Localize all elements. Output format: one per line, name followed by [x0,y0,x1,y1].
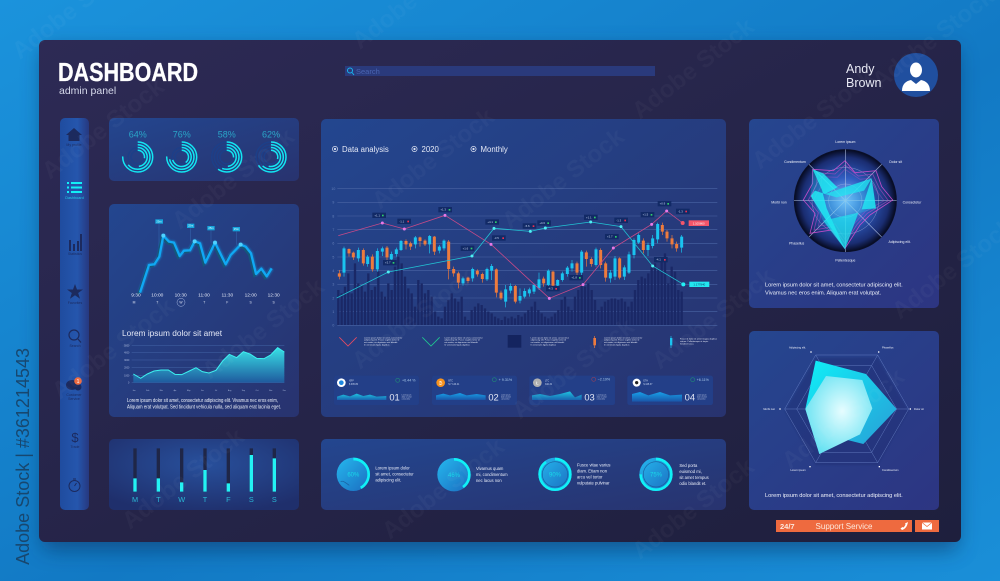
candlestick chart: 5 [332,255,334,259]
title: admin panel [59,85,116,97]
value tags: +0.6 [539,221,545,225]
card 04 [627,376,713,405]
value tags: -4.1 [656,258,661,262]
ring 58% [212,130,242,172]
candlestick chart: 4 [332,269,334,273]
cyan series: 1.177840 [693,282,706,286]
panel: weekly bars: T [203,495,208,504]
area chart: Jun [201,390,204,392]
area chart: Oct [256,389,259,392]
user name: Andy [846,62,874,76]
donut 60%: sit amet, consectetur [375,472,414,477]
legend row: In venenatis ligula dapibus [531,343,556,346]
card 03 [529,376,615,405]
icon: dashboard list: Dashboard [65,196,84,200]
legend row: est mattis, eu dignissim nisl blandit. [531,341,565,344]
selectors: Monthly [480,145,508,154]
area chart: Jan [133,390,135,392]
blue candles [344,223,682,307]
stock watermark: Adobe Stock [627,453,760,565]
axis labels [763,346,924,472]
legend row: adipiscing elit. Fusce sagittis tortor id [531,339,567,342]
icon: dollar: Trade [70,445,80,449]
axis labels [771,140,922,262]
panel: weekly bars: W [178,495,185,504]
legend row: hendrerit arcu. [680,342,694,345]
stock watermark: Adobe Stock [777,363,910,475]
panel: line and area charts [109,204,299,417]
area chart: Mar [160,390,163,392]
card 02: dolor sit amet [501,395,511,398]
stock watermark: Adobe Stock [197,273,330,385]
stock watermark: Adobe Stock [167,123,300,235]
value tags [372,201,690,291]
axis labels: Morbi non [763,407,776,411]
value tags: +2.7 [385,261,391,265]
legend row: est mattis, eu dignissim nisl blandit. [604,341,638,344]
candlestick chart: 1 [332,310,334,314]
area chart heading: Lorem ipsum dolor sit amet [122,328,223,338]
legend row: est mattis, eu dignissim nisl blandit. [364,341,398,344]
legend row: Lorem ipsum dolor sit amet, consectetur [444,337,483,339]
support service button: 24/7 [780,522,795,531]
icon: avatar [894,53,938,97]
value tags: -1.3 [678,209,683,213]
legend row: In venenatis ligula dapibus [364,343,389,346]
card 02: 02 [488,392,499,402]
card 01 [334,376,419,405]
ring 76% [167,130,197,172]
icon: star [67,284,83,305]
caption: Vivamus nec eros enim. Aliquam erat volutpat. [765,291,882,297]
stock watermark: Adobe Stock [117,423,250,535]
icon: search [69,330,81,348]
card 03: 340.32 [545,384,553,386]
crypto cards [334,376,713,405]
ring 64% [123,130,153,172]
legend row: Lorem ipsum dolor sit amet, consectetur [364,337,402,339]
donut 46%: nec lacus non [476,478,502,483]
line chart: F [226,301,228,305]
axis labels: Condimentum [784,160,806,164]
donut 90% [538,458,610,491]
support service button [776,520,912,532]
data polygons [805,361,897,454]
candlestick chart: 2 [332,296,334,300]
icon: home [66,128,82,147]
area chart: 1000 [124,375,130,377]
line chart: W [179,301,183,305]
axis labels: Lorem ipsum [790,468,806,472]
line chart: S [273,301,276,305]
icon: support chat: Customer [66,393,82,397]
axis labels: Dolor sit [914,407,924,411]
icon: statistics: Statistics [68,252,82,256]
stock watermark: Adobe Stock [627,13,760,125]
pink series [338,209,709,300]
panel: weekly bars: F [226,495,231,504]
card 04: $ 445.37 [643,384,653,386]
stock watermark: Adobe Stock [37,73,170,185]
donut 60%: 60% [347,473,360,479]
ring 76%: 76% [173,130,191,140]
axis labels: Phasellus [882,346,894,350]
legend row: est mattis, eu dignissim nisl blandit. [444,341,479,344]
panel: weekly bars: S [272,495,277,504]
donut 75%: sit amet tempus [679,475,709,480]
panel: polar radar [749,119,939,308]
icon: home: My profile [66,143,82,147]
selectors: Data analysis [342,145,389,154]
legend row: In venenatis ligula dapibus [604,343,629,346]
card 03: Lorem ipsum [597,394,606,396]
candlestick chart: 8 [332,214,334,218]
area chart: Jul [215,390,218,392]
line chart: 10:30 [175,293,187,299]
donut 75%: euismod mi, [679,469,702,474]
line chart: 25m [234,227,240,231]
panel: progress donuts [321,439,726,510]
axis labels: Dolor sit [889,160,902,164]
hexagon grid [785,355,909,465]
selectors: 2020 [422,145,440,154]
card 01: +6.44 % [402,379,416,383]
card 01: consectetur [402,397,411,400]
value tags: +1.6 [463,246,469,250]
line chart: 11:00 [198,293,210,299]
line chart: S [250,301,253,305]
card 02: Lorem ipsum [501,394,511,396]
ring 58%: 58% [218,130,236,140]
legend row: Lorem ipsum dolor sit amet, consectetur [531,337,569,339]
stock watermark: Adobe Stock [647,263,780,375]
legend row: rutrum. Pellentesque et turpis [680,340,708,343]
stock watermark: Adobe Stock [377,433,510,545]
legend row: Lorem ipsum dolor sit amet, consectetur [604,337,642,339]
donut 75%: Sed porta [679,463,697,468]
donut 75%: odio blandit et. [679,481,706,486]
candlestick chart [331,187,717,328]
card 04: ETH [643,381,648,383]
card 04: +6.11% [697,378,710,382]
axis labels: Adipiscing elit. [789,346,806,350]
card 02: + 9.31% [499,378,513,382]
donut 75% [639,458,709,491]
axis labels: Pellentesque [835,258,855,262]
card 03: consectetur [597,397,606,400]
area chart: May [187,390,190,392]
title [58,57,198,97]
value tags: -4.3 [548,287,553,291]
panel: weekly bars: S [249,495,254,504]
area chart: Feb [146,390,149,392]
axis labels: Morbi non [771,200,787,204]
donut 90%: 90% [549,473,562,479]
stock watermark: Adobe Stock [367,103,500,215]
area chart: Dec [283,390,286,392]
card 02: consectetur [501,397,510,400]
icon: dollar [70,430,80,449]
icon: support chat: 1 [77,379,80,385]
panel: data analysis [321,119,726,417]
line chart: T [156,301,158,305]
card 03: 03 [584,392,595,402]
axis labels: Consectetur [903,200,922,204]
card 03: −2.19% [598,378,611,382]
line chart: 12:30 [268,293,280,299]
panel: sidebar [60,118,89,510]
value tags: +1.3 [440,208,446,212]
value tags: +1.8 [571,276,577,280]
value tags: +1.1 [374,213,380,217]
line chart: 11:30 [221,293,234,299]
area chart: Sep [242,390,245,392]
ring 62% [256,130,286,172]
pink series: 1.105860 [693,221,705,225]
axis labels: Phasellus [789,242,804,246]
card 03: LTC [545,381,549,383]
legend row: In venenatis ligula dapibus [444,343,470,346]
area chart: Aug [228,389,231,392]
card 04: 04 [685,392,695,402]
line chart: M [133,301,136,305]
area chart caption: Lorem ipsum dolor sit amet, consectetur adipiscing elit. Vivamus nec eros enim, [127,398,278,404]
donut 60%: adipiscing elit. [375,478,401,483]
area chart: Apr [174,389,177,392]
line chart: 25m [208,226,214,230]
caption: Lorem ipsum dolor sit amet, consectetur adipiscing elit. [765,283,903,289]
candlestick chart: 3 [332,283,334,287]
line chart: T [203,301,205,305]
support service button: Support Service [816,522,873,531]
legend row: adipiscing elit. Fusce sagittis tortor id [444,339,480,342]
value tags: -1.3 [616,218,622,222]
card 04: dolor sit amet [697,395,707,398]
line chart: 25m [188,224,194,228]
icon: support chat [66,377,82,401]
card 01: 01 [389,392,400,402]
panel: weekly bars: M [132,495,138,504]
card 04: Lorem ipsum [697,394,707,396]
card 03: Ł [536,380,539,385]
area chart: 2000 [124,368,130,370]
radar disc [794,149,897,252]
card 01: XRP [349,381,354,383]
donut 75%: 75% [650,473,663,479]
panel: weekly bars [109,439,299,510]
area chart: 4000 [124,353,130,355]
candlestick chart: 10 [331,187,335,191]
value tags: +2.7 [607,235,613,239]
candlestick chart: 9 [332,201,334,205]
value tags: -3.5 [494,236,499,240]
donut 46%: mi, condimentum [476,472,508,477]
candlestick chart: 6 [332,242,334,246]
mail button [915,520,939,532]
area chart: 3000 [124,360,130,362]
line chart: 12:00 [245,293,257,299]
ring 62%: 62% [262,130,280,140]
legend row: adipiscing elit. Fusce sagittis tortor id [364,339,400,342]
axis labels: Lorem ipsum [835,140,855,144]
donut 90%: arcu vel tortor [577,475,603,480]
card 02 [432,376,517,405]
value tags: -5.6 [525,224,530,228]
stock watermark: Adobe Stock [497,123,630,235]
icon: search: Search [69,344,81,348]
card 04: consectetur [697,397,706,400]
icon: stopwatch [69,479,80,492]
legend row: Fusce id dolor sit amet magna dapibus [680,339,717,341]
area chart caption: Aliquam erat volutpat. Sed tincidunt vehicula nulla, sed aliquam erat lacinia eget. [127,404,281,410]
area chart: Nov [269,390,272,392]
value tags: -1.1 [399,219,405,223]
candlestick chart: 0 [332,324,334,328]
icon: star: Favorites [68,301,82,305]
card 02: $ 7 146.41 [448,384,460,386]
line chart [131,219,280,306]
area chart: 5000 [124,345,130,347]
stock watermark: Adobe Stock [347,263,480,375]
donut 90%: Fusce vitae varius [577,463,610,468]
stock watermark: Adobe Stock [747,63,880,175]
card 01: Lorem ipsum [402,394,411,396]
search bar [345,66,655,76]
area chart caption [127,398,281,410]
value tags: +0.9 [660,202,666,206]
cyan star [811,169,876,249]
caption: Lorem ipsum dolor sit amet, consectetur adipiscing elit. [765,493,903,499]
stock watermark: Adobe Stock [47,293,180,405]
panel: circular percentages [109,118,299,181]
value tags: +4.1 [487,220,493,224]
axis labels: Condimentum [882,468,899,472]
area chart [124,345,286,392]
volume bars [338,253,682,325]
donut 46%: 46% [448,473,461,479]
search bar: Search [356,67,380,76]
icon: support chat: Service [68,397,80,401]
area chart: 0 [128,383,130,385]
donut 90%: diam. Etiam non [577,469,608,474]
donut 90%: vulputate pulvinar [577,481,610,486]
donut 46% [437,458,508,491]
donut 60% [337,458,414,491]
card 01: dolor sit amet [402,395,412,398]
ring 64%: 64% [129,130,147,140]
value tags: +1.5 [643,213,649,217]
donut 46%: Vivamus quam [476,466,503,471]
line chart: 25m [156,219,162,223]
cyan series [337,220,709,298]
donut 60%: Lorem ipsum dolor [375,466,410,471]
magenta web [803,161,893,248]
line chart: 10:00 [151,293,164,299]
stock watermark: Adobe Stock [507,313,640,425]
card 03: dolor sit amet [597,395,607,398]
line chart: 9:30 [131,293,141,299]
candlestick chart: 7 [332,228,334,232]
legend row [339,335,717,348]
legend row: adipiscing elit. Fusce sagittis tortor id [604,339,640,342]
card 01: $ 395.80 [349,384,359,386]
icon: dollar: $ [71,430,79,445]
stock id: Adobe Stock | #361214543 [13,348,33,565]
title: DASHBOARD [58,57,198,87]
panel: weekly bars: T [156,495,161,504]
icon: dashboard list [65,182,84,200]
orange candles [339,223,677,303]
axis labels: Adipiscing elit. [889,240,911,244]
value tags: +1.1 [586,215,592,219]
card 02: BTC [448,381,453,383]
icon: statistics [68,234,82,256]
user name: Brown [846,76,881,90]
selectors [332,145,508,154]
panel: hexagon radar [749,331,939,510]
card 02: ₿ [439,379,443,385]
